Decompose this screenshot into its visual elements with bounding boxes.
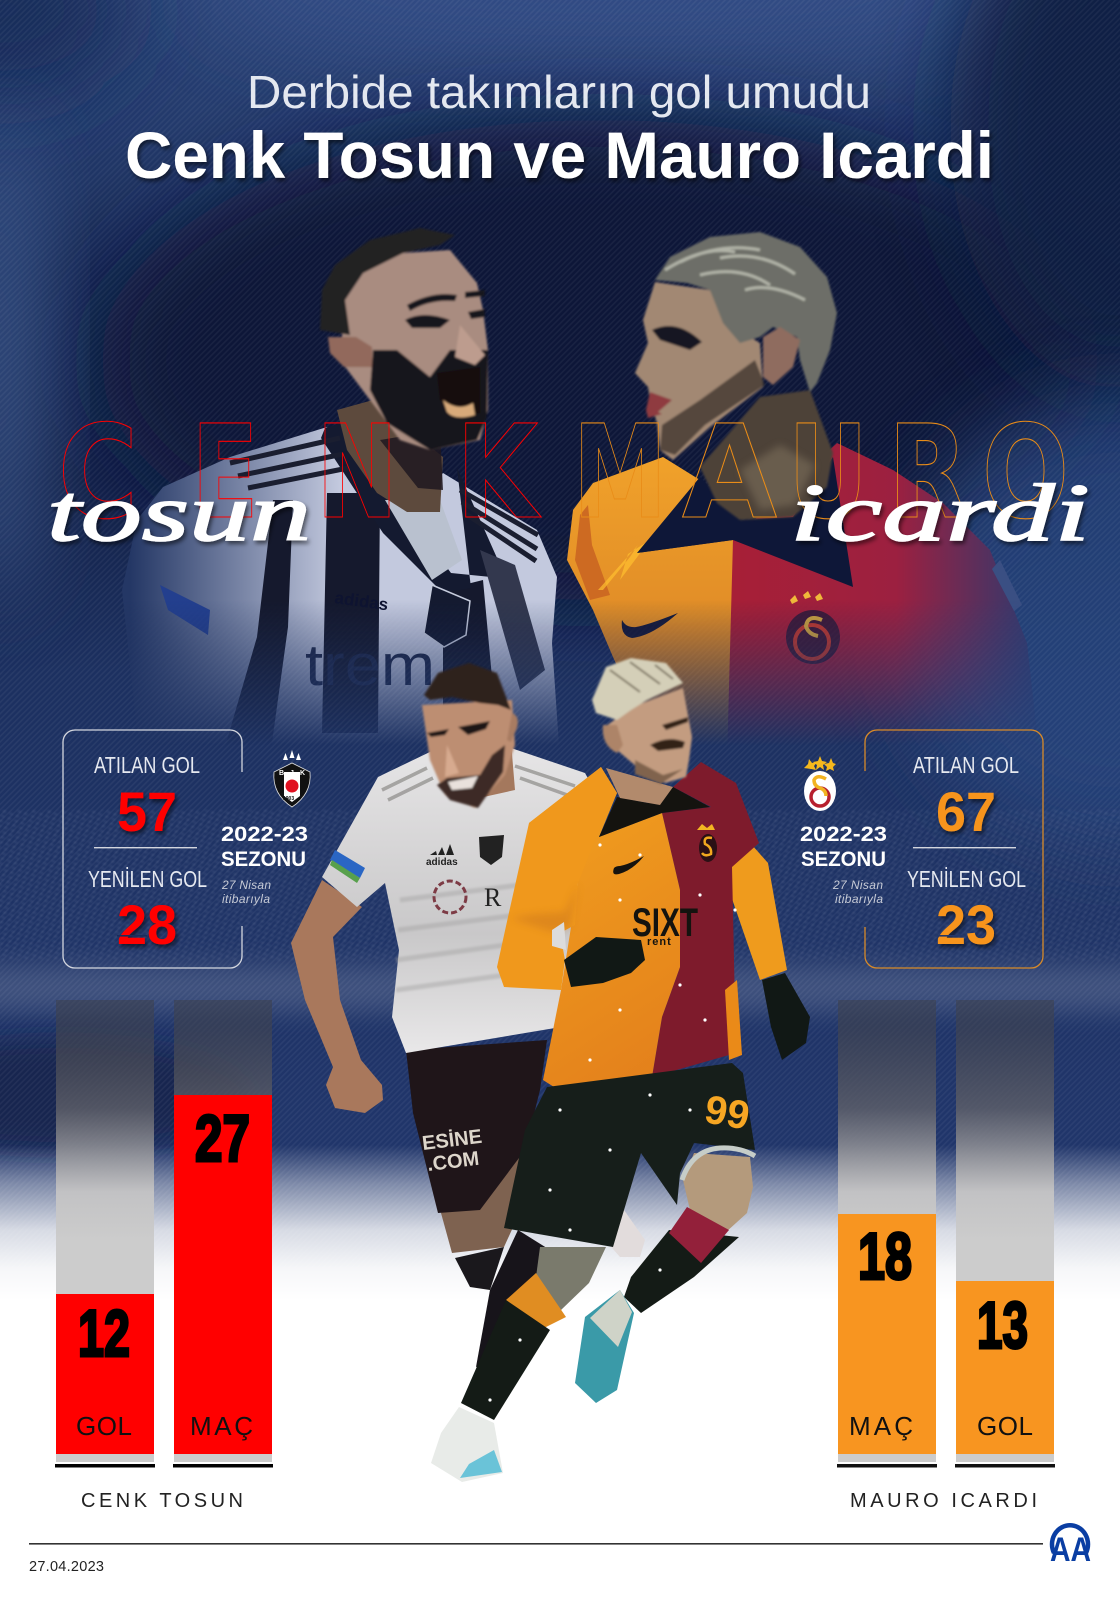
bar chart: Mauro Icardi — [837, 1000, 1055, 1512]
text: season right — [800, 823, 887, 906]
tattooed leg — [536, 1247, 606, 1310]
nike swoosh — [613, 856, 644, 874]
nike swoosh — [622, 613, 678, 638]
player cutout: Cenk Tosun: .COM — [426, 1148, 480, 1176]
head — [592, 658, 692, 784]
icon: Beşiktaş crest: 1903 — [283, 796, 294, 802]
outlined name: CENK: C — [58, 398, 138, 548]
label: atılan gol: ATILAN GOL — [913, 752, 1019, 778]
snow flecks — [488, 843, 737, 1402]
bar: maç 27: 27 — [195, 1101, 250, 1175]
shorts sponsor: ESİNE — [421, 1125, 483, 1155]
text: season left: itibarıyla — [222, 892, 270, 906]
bar: maç 27 — [173, 1000, 273, 1468]
panel: Icardi season stats — [865, 730, 1043, 968]
big crest — [786, 591, 840, 664]
bar: gol 12: GOL — [76, 1411, 132, 1441]
headline: Cenk Tosun ve Mauro Icardi — [125, 118, 994, 192]
text: season left: SEZONU — [221, 848, 306, 871]
right boot — [575, 1290, 634, 1403]
bar: gol 12 — [55, 1000, 155, 1468]
text: season right: itibarıyla — [835, 892, 883, 906]
text: season left: 2022-23 — [221, 823, 308, 846]
outlined name: CENK: E — [191, 398, 259, 548]
player cutout: Mauro Icardi: rent — [647, 936, 672, 948]
outlined name: MAURO: R — [888, 398, 968, 548]
far leg — [476, 1230, 550, 1367]
icon: Galatasaray crest — [804, 756, 836, 811]
left boot — [431, 1407, 503, 1482]
icon: Beşiktaş crest — [274, 750, 310, 807]
title — [125, 66, 994, 192]
flower logo — [434, 881, 466, 913]
outlined name: MAURO: A — [682, 398, 777, 548]
jersey — [122, 427, 560, 760]
crest — [479, 835, 504, 865]
player cutout: Mauro Icardi — [431, 658, 810, 1482]
bar: maç 18 — [837, 1000, 937, 1468]
text: season right: 2022-23 — [800, 823, 887, 846]
arm and fist — [291, 880, 383, 1113]
text: season right: SEZONU — [801, 848, 886, 871]
neck — [337, 400, 443, 512]
sleeve right — [729, 845, 787, 980]
bar: maç 18: MAÇ — [849, 1411, 913, 1441]
orange sock band — [506, 1273, 566, 1330]
shirt — [322, 748, 600, 1053]
black collar — [599, 787, 710, 837]
large portrait: Cenk Tosun: trem — [305, 633, 435, 698]
date: 27.04.2023 — [29, 1559, 104, 1575]
shirt gap — [552, 922, 566, 950]
neck — [440, 730, 515, 800]
bar: gol 13: 13 — [977, 1288, 1028, 1362]
text: season right: 27 Nisan — [832, 878, 883, 892]
jersey orange body — [529, 767, 680, 1087]
outlined name: MAURO: U — [788, 398, 868, 548]
value: 23: 23 — [936, 893, 996, 956]
shorts — [406, 1040, 547, 1213]
player cutout: Cenk Tosun — [291, 663, 645, 1367]
logo: AA: AA — [1050, 1531, 1091, 1569]
glove left — [564, 937, 645, 987]
large portrait: Cenk Tosun — [122, 400, 560, 760]
thigh — [441, 1130, 530, 1253]
knee — [683, 1153, 753, 1233]
outlined name: MAURO — [573, 398, 1069, 548]
sleeve patch — [330, 850, 365, 878]
shorts trim — [682, 1148, 755, 1180]
subtitle: Derbide takımların gol umudu — [247, 66, 871, 118]
outlined name: CENK — [58, 398, 541, 548]
text: season left — [221, 823, 308, 906]
sponsor SIXT: SIXT — [632, 901, 698, 945]
jersey red panel — [652, 762, 759, 1077]
shirt number: 99 — [701, 1088, 753, 1139]
sponsor marks: adidas — [333, 588, 389, 614]
value: 28: 28 — [117, 893, 177, 956]
script name: icardi: icardi — [790, 467, 1090, 558]
panel: Tosun season stats — [63, 730, 242, 968]
value: 57: 57 — [117, 780, 177, 843]
label: Cenk Tosun: CENK TOSUN — [81, 1490, 243, 1512]
neck — [606, 768, 673, 805]
glove right — [762, 973, 810, 1060]
outlined name: CENK: K — [456, 398, 541, 548]
outlined name: MAURO: M — [573, 398, 667, 548]
icon: Beşiktaş crest: BJK — [279, 770, 305, 777]
player cutout: Cenk Tosun: R — [484, 883, 502, 912]
label: atılan gol: ATILAN GOL — [94, 752, 200, 778]
adidas logo: adidas — [426, 857, 458, 868]
bar chart: Cenk Tosun — [55, 1000, 273, 1512]
bar: gol 13 — [955, 1000, 1055, 1468]
script name: tosun: tosun — [47, 467, 311, 558]
bar: maç 18: 18 — [858, 1219, 912, 1293]
bar: gol 12: 12 — [78, 1296, 130, 1370]
outlined name: MAURO: O — [982, 398, 1069, 548]
label: Mauro Icardi: MAURO ICARDI — [850, 1490, 1037, 1512]
big Tosun head — [320, 228, 488, 450]
bar: maç 27: MAÇ — [190, 1411, 253, 1441]
head — [422, 663, 518, 808]
big Icardi head — [635, 232, 837, 460]
sock — [455, 1247, 504, 1290]
sleeve fold shading — [510, 883, 578, 932]
crest — [697, 824, 717, 862]
bar: gol 13: GOL — [977, 1411, 1033, 1441]
sleeve left — [497, 767, 617, 990]
text: season left: 27 Nisan — [221, 878, 271, 892]
far boot — [605, 1200, 645, 1257]
black shin — [461, 1300, 550, 1420]
outlined name: CENK: N — [316, 398, 398, 548]
footer rule — [29, 1543, 1043, 1545]
red sock band — [669, 1207, 729, 1263]
value: 67: 67 — [936, 780, 996, 843]
large portrait: Mauro Icardi — [567, 390, 1040, 760]
label: yenilen gol: YENİLEN GOL — [907, 866, 1026, 892]
back hem — [725, 980, 742, 1060]
right sock — [624, 1230, 739, 1313]
shorts — [504, 1063, 755, 1247]
label: yenilen gol: YENİLEN GOL — [88, 866, 207, 892]
